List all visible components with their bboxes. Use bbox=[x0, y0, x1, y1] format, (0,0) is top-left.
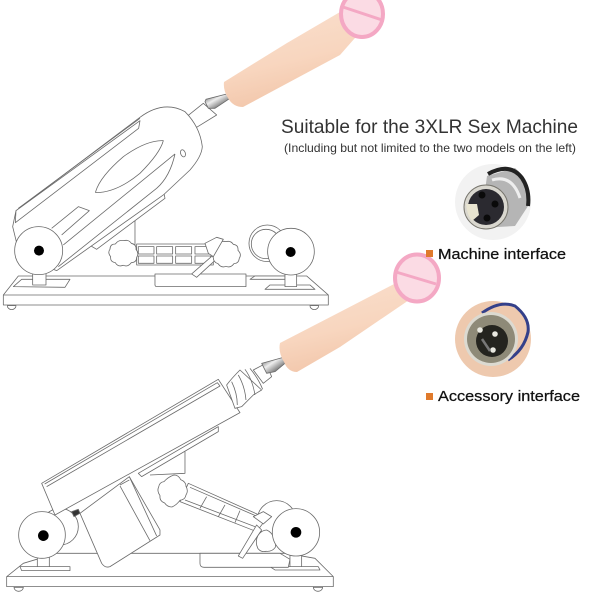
lower housing box bbox=[72, 477, 160, 567]
adjustment knob bbox=[158, 475, 187, 507]
heading: Suitable for the 3XLR Sex Machine bbox=[281, 116, 578, 138]
icon: accessory interface connector bbox=[455, 301, 531, 377]
wheels bbox=[19, 509, 320, 567]
connector bbox=[205, 94, 230, 108]
attachment: upper bbox=[224, 0, 383, 107]
motor housing bbox=[13, 107, 202, 271]
wheels bbox=[15, 227, 314, 287]
label: accessory interface: Accessory interface bbox=[438, 388, 580, 405]
main housing bbox=[42, 379, 240, 515]
subheading: (Including but not limited to the two models on the left) bbox=[284, 141, 576, 155]
shaft bbox=[253, 363, 272, 383]
slider rail bbox=[155, 274, 246, 287]
rear disks bbox=[42, 501, 296, 545]
label: machine interface: Machine interface bbox=[438, 246, 566, 263]
rear disk bbox=[249, 225, 286, 262]
icon: machine interface connector bbox=[455, 164, 531, 240]
machine: upper line drawing bbox=[3, 94, 328, 310]
lower knob bbox=[256, 530, 276, 552]
connector bbox=[262, 357, 285, 373]
base plate bbox=[7, 553, 333, 591]
machine: lower line drawing bbox=[7, 357, 333, 591]
height adjust grid bbox=[150, 452, 272, 558]
bellows bbox=[227, 368, 263, 408]
shaft bbox=[187, 103, 217, 127]
bullet: machine interface bbox=[426, 250, 433, 257]
height adjust grid bbox=[135, 220, 213, 265]
adjustment knobs bbox=[109, 237, 240, 267]
bullet: accessory interface bbox=[426, 393, 433, 400]
slanted arm bbox=[192, 255, 217, 277]
base plate bbox=[3, 276, 328, 310]
attachment: lower bbox=[280, 254, 439, 372]
